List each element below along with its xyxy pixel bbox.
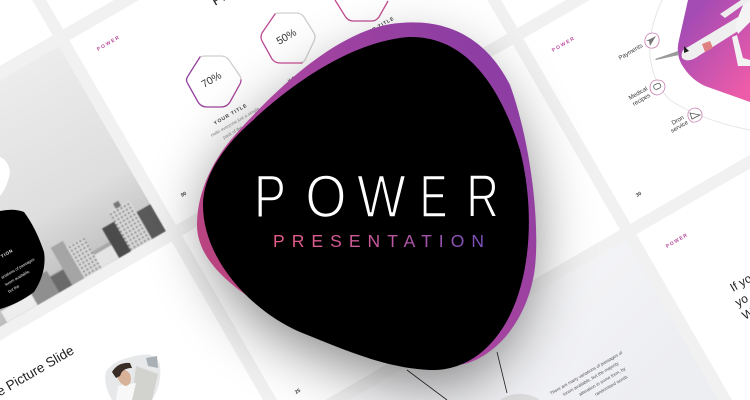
small label: POWER: [665, 232, 690, 250]
quote text: yo: [732, 291, 750, 310]
slide: quote fragment: [665, 232, 750, 323]
icon: medical recipes: [650, 80, 665, 95]
black blob text: lorem available,: [4, 269, 31, 287]
mouse: [500, 394, 540, 400]
title: [254, 162, 499, 231]
portrait photo: [105, 354, 160, 400]
description text: Hello everyone just a simple: [210, 106, 261, 138]
title: O: [305, 163, 346, 230]
title: R: [466, 164, 499, 231]
hexagon third: [335, 0, 388, 21]
hexagon 70 percent: [186, 56, 241, 107]
hexagon 70 percent: 70%: [200, 70, 224, 91]
icon: payments: [645, 33, 659, 48]
blob shadow: [207, 51, 533, 384]
blob: purple back shape: [197, 22, 536, 367]
quote text: [728, 271, 750, 323]
paragraph: randomised words: [594, 374, 629, 397]
hexagon 50 percent: 50%: [274, 27, 299, 48]
black blob text: ariations of passages: [0, 257, 35, 280]
black text blob: [0, 210, 45, 309]
icon: dron service: [688, 108, 702, 122]
title: E: [420, 162, 447, 230]
slide: drone services: [551, 0, 750, 199]
drone: [655, 0, 750, 66]
small label: POWER: [96, 34, 122, 53]
slide: city picture: [0, 157, 166, 323]
connector curve: [650, 0, 750, 130]
title label 1: YOUR TITLE: [213, 103, 249, 127]
label: medical recipes: recipes: [632, 93, 652, 108]
page number: 90: [180, 191, 188, 199]
page number: 30: [635, 191, 643, 199]
black blob text: TION: [0, 248, 14, 259]
label: payments: Payments: [618, 43, 644, 62]
paragraph: alteration in some form, by: [578, 366, 627, 397]
magenta picture shape: [678, 0, 750, 102]
title: P: [254, 163, 286, 230]
blob: black front shape: [203, 37, 529, 370]
slide: hexagon percentages: [96, 0, 396, 199]
description text: pack of the: [222, 125, 244, 140]
black blob text: [0, 248, 35, 294]
white picture label: [0, 157, 10, 196]
hexagon 50 percent: [261, 13, 315, 63]
label: dron service: service: [670, 120, 690, 135]
label: medical recipes: [628, 86, 652, 108]
title label 3: YOUR TITLE: [360, 16, 396, 40]
subtitle: PRESENTATION: [273, 231, 484, 251]
page number: 25: [294, 388, 302, 396]
black blob text: but the: [7, 283, 21, 294]
cable lines: [407, 352, 507, 400]
label: dron service: Dron: [671, 115, 685, 127]
small label: POWER: [551, 35, 577, 54]
title: W: [357, 162, 406, 230]
cityscape: [0, 188, 166, 323]
slide: paragraph and mouse: [407, 350, 629, 400]
title label 2: YOUR TITLE: [287, 61, 323, 85]
slide: service picture: [0, 343, 302, 400]
paragraph: There are many variations of passages of: [549, 350, 624, 396]
paragraph: lorem available, but the majority: [562, 360, 620, 397]
label: medical recipes: Medical: [628, 86, 649, 102]
